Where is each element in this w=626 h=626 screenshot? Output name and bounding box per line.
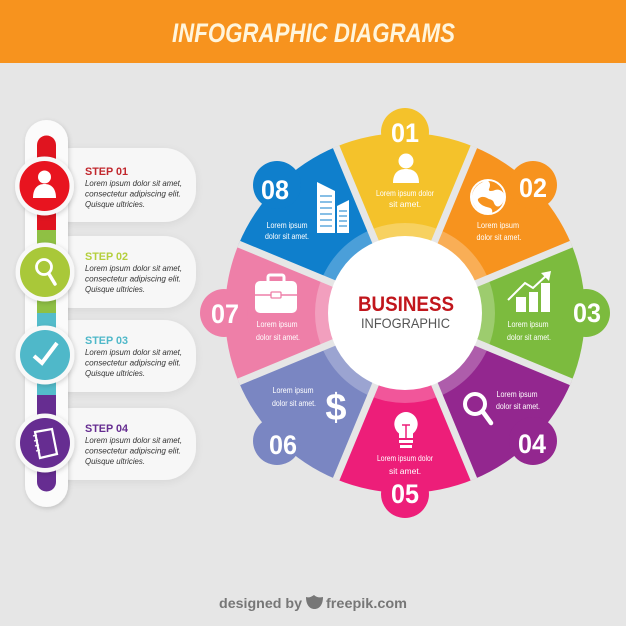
- segment labels: Lorem ipsum: [496, 389, 538, 399]
- segment 03: [405, 244, 610, 382]
- numbers: 04: [518, 429, 546, 459]
- step 02 card: Lorem ipsum dolor sit amet,: [85, 263, 182, 273]
- segment 05: [336, 313, 474, 518]
- step 02 card: consectetur adipiscing elit.: [85, 274, 181, 284]
- segment labels: sit amet.: [389, 466, 421, 476]
- icon: step 01 person: [15, 156, 74, 216]
- segment labels: Lorem ipsum: [272, 385, 314, 395]
- numbers: 07: [211, 299, 239, 329]
- step 03 card: STEP 03: [85, 335, 128, 347]
- segment 07: [200, 244, 405, 382]
- icon: person: [393, 154, 419, 183]
- numbers: 05: [391, 479, 419, 509]
- segment 06: [211, 264, 454, 507]
- step 02 card: [40, 236, 196, 308]
- center circle: [328, 236, 482, 390]
- footer credit: freepik.com: [326, 595, 407, 611]
- segment 02: [356, 119, 599, 362]
- icon: briefcase: [255, 275, 297, 313]
- segment labels: dolor sit amet.: [272, 398, 316, 408]
- segment labels: Lorem ipsum dolor: [376, 188, 434, 198]
- icon: step 04 notebook: [16, 414, 74, 472]
- step 01 card: Quisque ultricies.: [85, 199, 145, 209]
- step 03 card: Quisque ultricies.: [85, 368, 145, 378]
- icon: magnifier: [465, 394, 491, 423]
- step 04 card: [40, 408, 196, 480]
- icon: light bulb: [394, 412, 418, 448]
- step 04 card: consectetur adipiscing elit.: [85, 446, 181, 456]
- step 04 card: Quisque ultricies.: [85, 456, 145, 466]
- step 02 card: Quisque ultricies.: [85, 284, 145, 294]
- segment 04: [356, 264, 599, 507]
- icon: globe: [471, 180, 505, 214]
- icon: step 03 check: [16, 326, 74, 384]
- segment labels: Lorem ipsum dolor: [377, 453, 433, 463]
- translucent ring: [315, 223, 495, 403]
- segment labels: dolor sit amet.: [265, 231, 309, 241]
- step 01 card: consectetur adipiscing elit.: [85, 188, 181, 198]
- icon: step 02 magnifier: [16, 242, 74, 302]
- vertical timeline bar: [25, 120, 68, 507]
- segment labels: dolor sit amet.: [476, 232, 522, 242]
- step 04 card: Lorem ipsum dolor sit amet,: [85, 435, 182, 445]
- center circle: BUSINESS: [358, 293, 454, 316]
- step 01 card: Lorem ipsum dolor sit amet,: [85, 178, 182, 188]
- step 04 card: STEP 04: [85, 423, 129, 435]
- step 01 card: STEP 01: [85, 166, 128, 178]
- segment labels: [256, 188, 551, 476]
- numbers: 08: [261, 175, 289, 205]
- icon: freepik logo: [306, 595, 323, 609]
- numbers: 01: [391, 118, 419, 148]
- step 03 card: consectetur adipiscing elit.: [85, 358, 181, 368]
- segment labels: dolor sit amet.: [496, 401, 540, 411]
- segment 08: [211, 119, 454, 362]
- segment labels: Lorem ipsum: [508, 319, 548, 329]
- numbers: 03: [573, 298, 601, 328]
- numbers: [211, 118, 601, 509]
- panel: steps list: [15, 120, 196, 507]
- chart: radial business diagram: [200, 108, 610, 518]
- segment labels: Lorem ipsum: [266, 220, 308, 230]
- segment labels: dolor sit amet.: [256, 332, 300, 342]
- icon: buildings: [317, 182, 349, 233]
- segment labels: dolor sit amet.: [507, 332, 551, 342]
- footer credit: designed by: [219, 595, 302, 611]
- icon: dollar: $: [325, 387, 347, 429]
- numbers: 02: [519, 173, 547, 203]
- segment 01: [336, 108, 474, 313]
- footer credit: [219, 595, 407, 611]
- step 03 card: [40, 320, 196, 392]
- header band: [0, 0, 626, 63]
- icon: bar chart with arrow: [508, 271, 551, 312]
- title: INFOGRAPHIC DIAGRAMS: [172, 18, 455, 48]
- segment labels: Lorem ipsum: [256, 319, 298, 329]
- center circle: INFOGRAPHIC: [361, 315, 450, 331]
- segment labels: Lorem ipsum: [477, 220, 519, 230]
- numbers: 06: [269, 430, 297, 460]
- step 01 card: [40, 148, 196, 222]
- segment labels: sit amet.: [389, 199, 421, 209]
- step 03 card: Lorem ipsum dolor sit amet,: [85, 347, 182, 357]
- step 02 card: STEP 02: [85, 251, 128, 263]
